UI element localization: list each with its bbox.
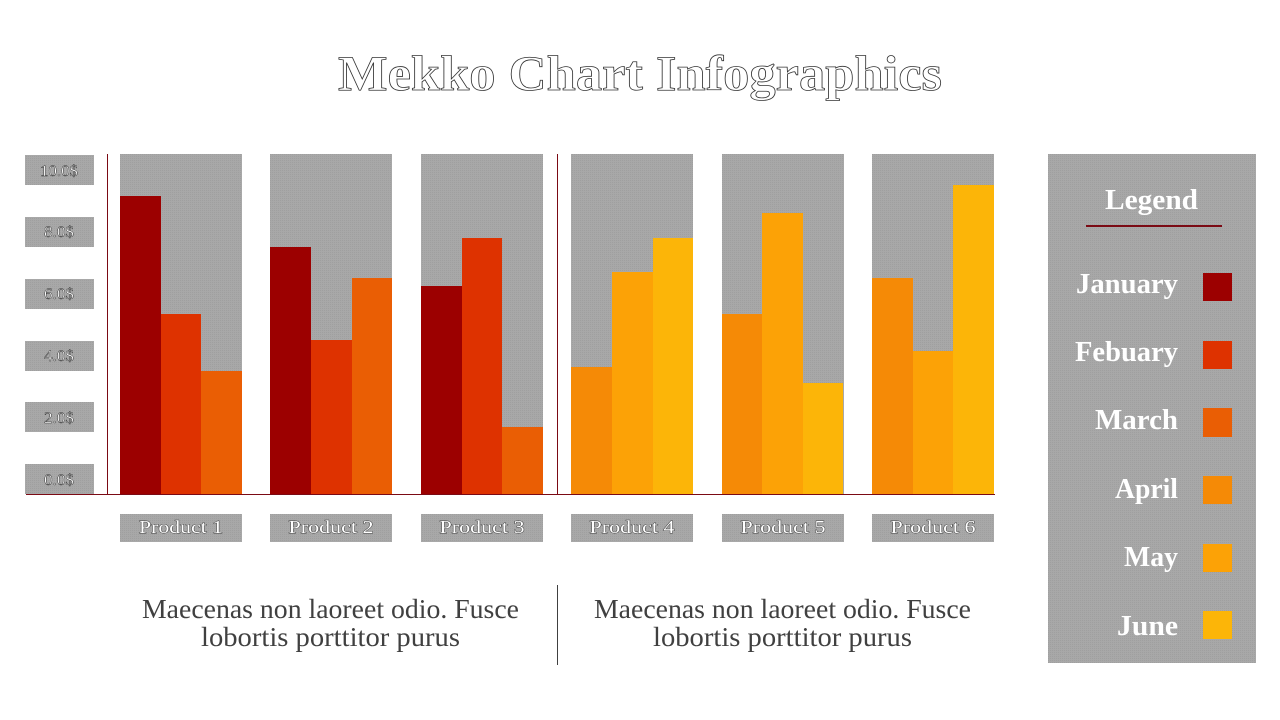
product 1 bars	[120, 154, 242, 495]
product 4 bars	[571, 154, 693, 495]
left description text: Maecenas non laoreet odio. Fusce	[142, 594, 519, 624]
right description text: lobortis porttitor purus	[653, 622, 912, 652]
product 3 bars	[421, 154, 543, 495]
legend item: March: March	[1095, 404, 1178, 436]
legend item: March	[1095, 404, 1232, 437]
legend item: May	[1124, 541, 1232, 573]
legend item: January	[1076, 268, 1232, 301]
legend item: May: May	[1124, 541, 1178, 573]
y axis labels: 8.0$	[44, 224, 74, 241]
product labels: Product 1	[139, 517, 223, 537]
product labels: Product 2	[288, 517, 374, 537]
product labels: Product 5	[740, 517, 826, 537]
y axis labels: 0.0$	[44, 472, 74, 489]
right description text	[594, 594, 971, 652]
product labels	[120, 514, 994, 542]
legend item: April	[1115, 473, 1232, 505]
product 2 bars	[270, 154, 392, 495]
product labels: Product 6	[890, 517, 976, 537]
left description text: lobortis porttitor purus	[201, 622, 460, 652]
y axis labels: 10.0$	[40, 163, 78, 180]
legend item: January: January	[1076, 268, 1178, 300]
y axis labels: 4.0$	[44, 348, 74, 365]
legend item: April: April	[1115, 473, 1178, 505]
legend item: Febuary	[1075, 336, 1232, 369]
product 6 bars	[872, 154, 994, 495]
y axis labels	[25, 155, 94, 494]
right description text: Maecenas non laoreet odio. Fusce	[594, 594, 971, 624]
legend item: June	[1117, 610, 1232, 642]
y axis labels: 6.0$	[44, 286, 74, 303]
panel: legend	[1048, 154, 1256, 663]
legend item: June: June	[1117, 610, 1178, 642]
title: Mekko Chart Infographics	[338, 45, 942, 101]
product labels: Product 4	[590, 517, 674, 537]
product labels: Product 3	[440, 517, 524, 537]
y axis labels: 2.0$	[44, 410, 74, 427]
product 5 bars	[722, 154, 844, 495]
legend heading: Legend	[1105, 184, 1198, 216]
chart axes	[26, 154, 995, 495]
legend item: Febuary: Febuary	[1075, 336, 1178, 368]
chart: product bars	[120, 154, 994, 495]
left description text	[142, 594, 519, 652]
